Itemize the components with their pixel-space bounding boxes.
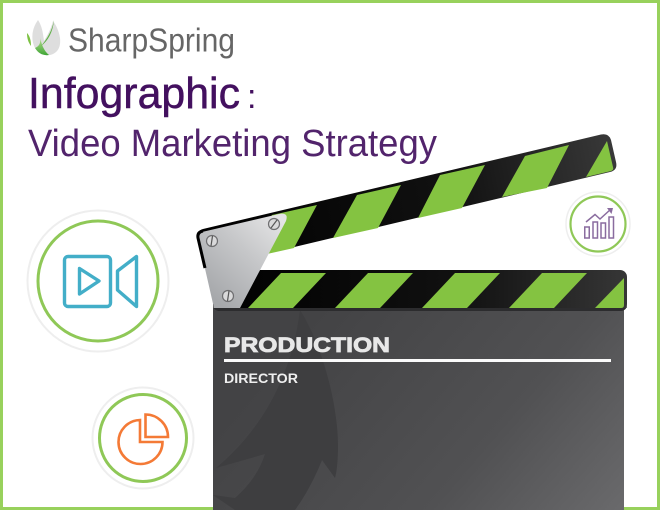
title colon: : bbox=[247, 78, 256, 116]
board rule bbox=[224, 359, 611, 362]
clapperboard bbox=[197, 134, 627, 510]
icon: pie chart badge bbox=[92, 388, 194, 488]
clapper upper arm bbox=[197, 134, 616, 268]
board label DIRECTOR: DIRECTOR bbox=[224, 371, 298, 386]
title line 2: Video Marketing Strategy bbox=[28, 123, 437, 165]
clapper lower bar bbox=[213, 270, 627, 311]
title line 1: Infographic bbox=[28, 69, 240, 118]
board heading PRODUCTION: PRODUCTION bbox=[224, 334, 390, 357]
icon: video camera badge bbox=[28, 210, 168, 352]
board body bbox=[213, 308, 624, 510]
hinge plate bbox=[198, 214, 287, 308]
board watermark leaf bbox=[213, 310, 338, 510]
icon: SharpSpring leaf bbox=[27, 20, 60, 55]
logo wordmark: SharpSpring bbox=[68, 22, 235, 58]
SharpSpring logo bbox=[27, 20, 235, 58]
icon: growth chart badge bbox=[566, 192, 630, 256]
hinge screws bbox=[206, 218, 280, 302]
